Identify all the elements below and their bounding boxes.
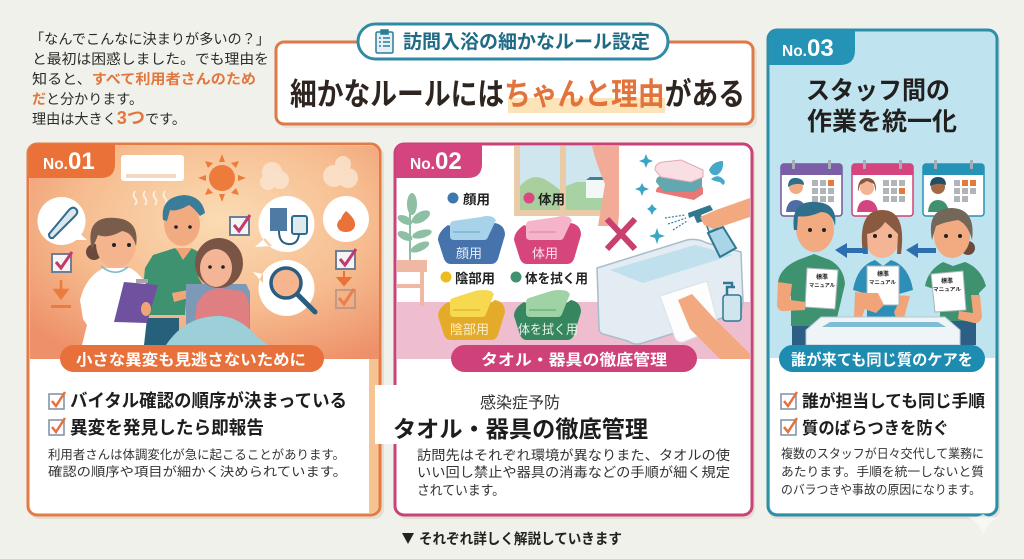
legend and basket: drying: 体を拭く用 <box>518 322 578 337</box>
panel: No.03 <box>768 30 1000 519</box>
tab: No.01 <box>29 144 115 178</box>
icon: steam clouds <box>260 156 358 190</box>
panel: No.01 <box>28 144 384 519</box>
intro text: 「なんでこんなに決まりが多いの？」 <box>30 31 270 47</box>
icon: cloth and hand <box>660 281 750 359</box>
figure: left staff <box>777 202 845 345</box>
manual: left: マニュアル <box>809 283 835 289</box>
intro text: と最初は困惑しました。でも理由を <box>32 51 269 67</box>
checklist: バイタル確認の順序が決まっている <box>70 390 347 411</box>
manual: center: マニュアル <box>869 280 896 286</box>
bubble: blood pressure monitor <box>255 196 315 252</box>
icon: clipboard <box>376 30 393 53</box>
footer note: それぞれ詳しく解説していきます <box>419 530 622 548</box>
figure: right staff <box>925 208 986 345</box>
panel: No.02 <box>375 144 755 519</box>
legend and basket: private area: 陰部用 <box>455 271 495 286</box>
banner: same quality: 誰が来ても同じ質のケアを <box>791 350 973 369</box>
arrow: center to left <box>835 243 867 258</box>
icon: water drops <box>709 161 725 185</box>
main title: 細かなルールにはちゃんと理由がある <box>290 77 745 112</box>
calendar: staff 2 <box>852 160 913 216</box>
body text <box>48 447 347 479</box>
banner: same quality <box>779 345 985 372</box>
tab: No.02: No.02 <box>410 148 462 175</box>
manual: left <box>805 268 838 309</box>
icon: window <box>514 146 619 216</box>
icon: bathtub <box>597 239 743 344</box>
illustration background <box>30 146 379 359</box>
intro text: 理由は大きく3つです。 <box>32 108 186 128</box>
intro text: だと分かります。 <box>32 91 143 107</box>
icon: sun <box>198 154 246 202</box>
bubble: magnifier <box>253 260 315 316</box>
tab: No.01: No.01 <box>43 148 95 175</box>
icon: spray bottle and hand <box>665 198 750 257</box>
icon: air conditioner <box>121 155 184 181</box>
legend and basket: body: 体用 <box>538 192 565 207</box>
intro text: 知ると、 すべて利用者さんのため <box>32 71 256 87</box>
manual: center <box>864 266 899 313</box>
checklist: 誰が担当しても同じ手順 <box>802 391 985 411</box>
manual: right: マニュアル <box>933 287 961 293</box>
icon: towel stack <box>655 160 703 200</box>
body text <box>417 447 731 498</box>
legend and basket: private area: 陰部用 <box>450 322 489 337</box>
white content area <box>770 358 995 513</box>
checklist <box>49 390 347 438</box>
bubble: thermometer <box>37 197 87 245</box>
floor <box>397 302 750 359</box>
tab: No.03 <box>769 30 855 65</box>
banner: small changes <box>60 345 324 372</box>
text patch <box>375 385 397 444</box>
checklist <box>781 391 985 438</box>
watermark sparkle <box>968 514 999 535</box>
figure: caregiver in green <box>141 195 220 346</box>
heading: unify work: スタッフ間の <box>806 77 950 105</box>
legend and basket: face: 顔用 <box>463 192 490 207</box>
body text <box>781 446 984 497</box>
body text: 利用者さんは体調変化が急に起こることがあります。 <box>48 447 345 462</box>
subtitle badge <box>358 24 668 59</box>
bubble: flame <box>323 196 369 242</box>
calendar: staff 1 <box>781 160 842 216</box>
calendar: staff 3 <box>923 160 984 216</box>
subheading: infection prevention: 感染症予防 <box>480 394 560 412</box>
legend and basket: body: 体用 <box>532 246 558 261</box>
manual: right: 標準 <box>941 277 953 285</box>
figure: patient in wheelchair <box>166 238 268 345</box>
legend and basket: face <box>438 192 505 264</box>
icon: cross mark <box>607 219 635 249</box>
icon: soap pump <box>723 283 741 321</box>
intro text <box>30 31 270 128</box>
legend and basket: drying: 体を拭く用 <box>525 271 588 286</box>
white content area <box>30 359 369 513</box>
icon: sparkles <box>635 154 665 244</box>
body text: 訪問先はそれぞれ環境が異なりまた、タオルの使 <box>417 447 731 463</box>
body text: されています。 <box>417 483 505 498</box>
icon: heat waves <box>134 191 166 205</box>
legend and basket: private area <box>438 271 505 340</box>
banner: towels: タオル・器具の徹底管理 <box>481 350 668 369</box>
right tint strip <box>369 359 378 513</box>
check mark: center <box>230 215 250 235</box>
banner: small changes: 小さな異変も見逃さないために <box>76 350 306 369</box>
tab: No.02 <box>396 144 482 178</box>
body text: 確認の順序や項目が細かく決められています。 <box>48 464 347 479</box>
legend and basket: drying <box>510 271 588 340</box>
icon: side table <box>397 260 427 306</box>
check and arrow: left <box>51 252 72 308</box>
title highlight marker <box>508 98 665 113</box>
banner: towels <box>451 345 697 372</box>
subtitle badge: 訪問入浴の細かなルール設定 <box>403 31 650 53</box>
icon: curtain <box>592 146 619 226</box>
body text: のバラつきや事故の原因になります。 <box>781 482 981 497</box>
icon: bathtub <box>806 317 960 345</box>
heading: unify work <box>806 77 957 136</box>
tab: No.03: No.03 <box>782 35 834 62</box>
manual: center: 標準 <box>877 270 889 278</box>
checklist: 異変を発見したら即報告 <box>70 418 264 438</box>
heading: towels and tools: タオル・器具の徹底管理 <box>393 416 648 442</box>
legend and basket: body <box>514 192 581 264</box>
check and arrow: right <box>336 249 356 308</box>
arrow: right to center <box>906 243 936 258</box>
body text: 複数のスタッフが日々交代して業務に <box>781 446 984 461</box>
white content area <box>397 359 750 513</box>
figure: nurse <box>80 218 158 345</box>
title panel <box>276 42 757 128</box>
legend and basket: face: 顔用 <box>456 246 482 261</box>
icon: plant <box>396 193 433 260</box>
heading: unify work: 作業を統一化 <box>807 108 957 136</box>
clipboard <box>114 282 158 323</box>
manual: right <box>931 271 966 312</box>
body text: いい回し禁止や器具の消毒などの手順が細く規定 <box>417 465 730 480</box>
body text: あたります。手順を統一しないと質 <box>781 464 984 479</box>
blanket <box>166 316 268 345</box>
figure: center staff <box>853 210 913 319</box>
checklist: 質のばらつきを防ぐ <box>802 419 949 438</box>
manual: left: 標準 <box>816 273 828 281</box>
